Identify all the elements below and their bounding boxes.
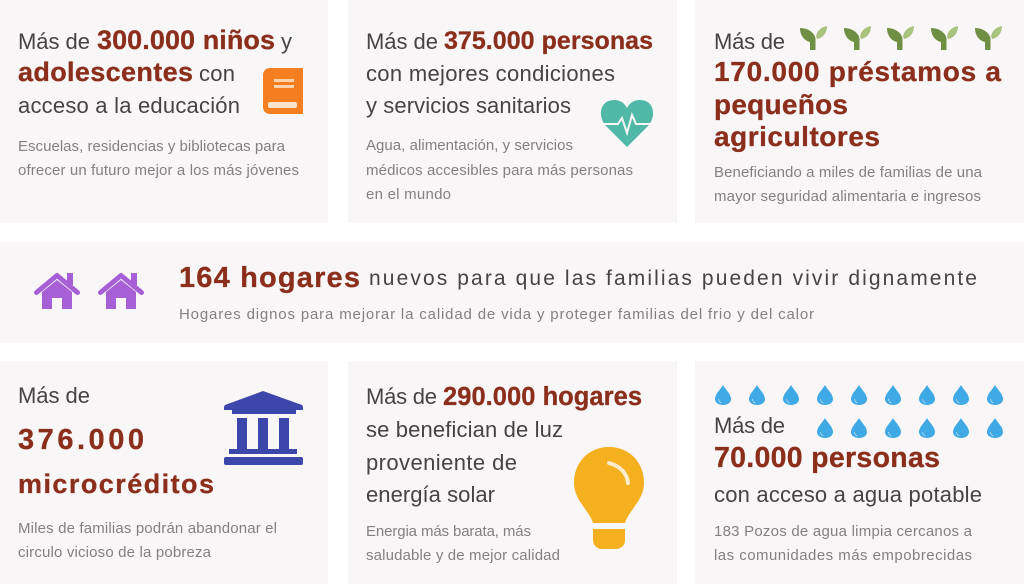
icon: two houses [36, 273, 142, 309]
heading: health: 375.000 personas [444, 27, 653, 55]
heading: health: y servicios sanitarios [366, 93, 571, 118]
heading: drinking water: 70.000 personas [714, 442, 940, 474]
heading: drinking water [714, 413, 982, 507]
text: solar description [366, 523, 560, 564]
heading: education: adolescentes [18, 57, 193, 87]
text: water description: las comunidades más empobrecidas [714, 547, 972, 564]
text: health description [366, 137, 633, 203]
heading: education [18, 25, 292, 118]
panel: microcredits [0, 361, 328, 584]
heading: microcredits: microcréditos [18, 469, 214, 499]
heading: education: acceso a la educación [18, 93, 240, 118]
icon: heart with pulse [600, 100, 654, 147]
text: agriculture description: mayor seguridad alimentaria e ingresos [714, 188, 981, 205]
heading: microcredits: 376.000 [18, 424, 144, 456]
heading: solar energy [366, 383, 642, 507]
text: agriculture description [714, 164, 983, 205]
heading: agriculture loans: agricultores [714, 121, 880, 152]
heading: education: con [199, 61, 235, 86]
heading: housing [179, 262, 977, 294]
text: education description: ofrecer un futuro mejor a los más jóvenes [18, 162, 299, 179]
heading: housing: nuevos para que las familias pueden vivir dignamente [369, 267, 977, 290]
heading: agriculture loans [714, 29, 1001, 152]
text: solar description: saludable y de mejor calidad [366, 547, 560, 564]
heading: drinking water: Más de [714, 413, 785, 438]
text: health description: en el mundo [366, 186, 451, 203]
text: health description: Agua, alimentación, y servicios [366, 137, 573, 154]
heading: agriculture loans: pequeños [714, 89, 848, 120]
text: education description: Escuelas, residencias y bibliotecas para [18, 138, 286, 155]
heading: solar energy: 290.000 hogares [443, 383, 642, 411]
text: microcredits description [18, 520, 277, 561]
heading: agriculture loans: Más de [714, 29, 785, 54]
text: housing description: Hogares dignos para mejorar la calidad de vida y proteger familias del frio y del calor [179, 306, 814, 323]
text: microcredits description: Miles de familias podrán abandonar el [18, 520, 277, 537]
heading: health: Más de [366, 29, 438, 54]
icon: book [263, 68, 303, 114]
heading: agriculture loans: 170.000 préstamos a [714, 56, 1001, 87]
text: health description: médicos accesibles para más personas [366, 162, 633, 179]
heading: solar energy: proveniente de [366, 450, 517, 475]
text: water description: 183 Pozos de agua limpia cercanos a [714, 523, 973, 540]
panel: housing band [0, 242, 1024, 343]
icon: water drops [715, 385, 1003, 438]
heading: solar energy: se benefician de luz [366, 417, 563, 442]
icon: light bulb [574, 447, 644, 549]
heading: education: Más de [18, 29, 90, 54]
panel: solar energy [348, 361, 677, 584]
heading: health [366, 27, 653, 118]
panel: education [0, 0, 328, 223]
text: solar description: Energia más barata, más [366, 523, 531, 540]
heading: microcredits: Más de [18, 383, 90, 408]
text: water description [714, 523, 973, 564]
panel: drinking water [695, 361, 1024, 584]
icon: bank building [224, 391, 303, 465]
text: education description [18, 138, 299, 179]
heading: drinking water: con acceso a agua potable [714, 482, 982, 507]
heading: solar energy: Más de [366, 384, 437, 409]
heading: education: 300.000 niños [97, 25, 275, 55]
heading: education: y [281, 29, 292, 54]
text: agriculture description: Beneficiando a miles de familias de una [714, 164, 983, 181]
panel: health [348, 0, 677, 223]
heading: microcredits [18, 383, 214, 499]
heading: housing: 164 hogares [179, 262, 360, 294]
heading: health: con mejores condiciones [366, 61, 615, 86]
panel: agriculture loans [695, 0, 1024, 223]
text: microcredits description: circulo vicioso de la pobreza [18, 544, 212, 561]
heading: solar energy: energía solar [366, 482, 495, 507]
icon: row of sprouts [800, 26, 1002, 50]
